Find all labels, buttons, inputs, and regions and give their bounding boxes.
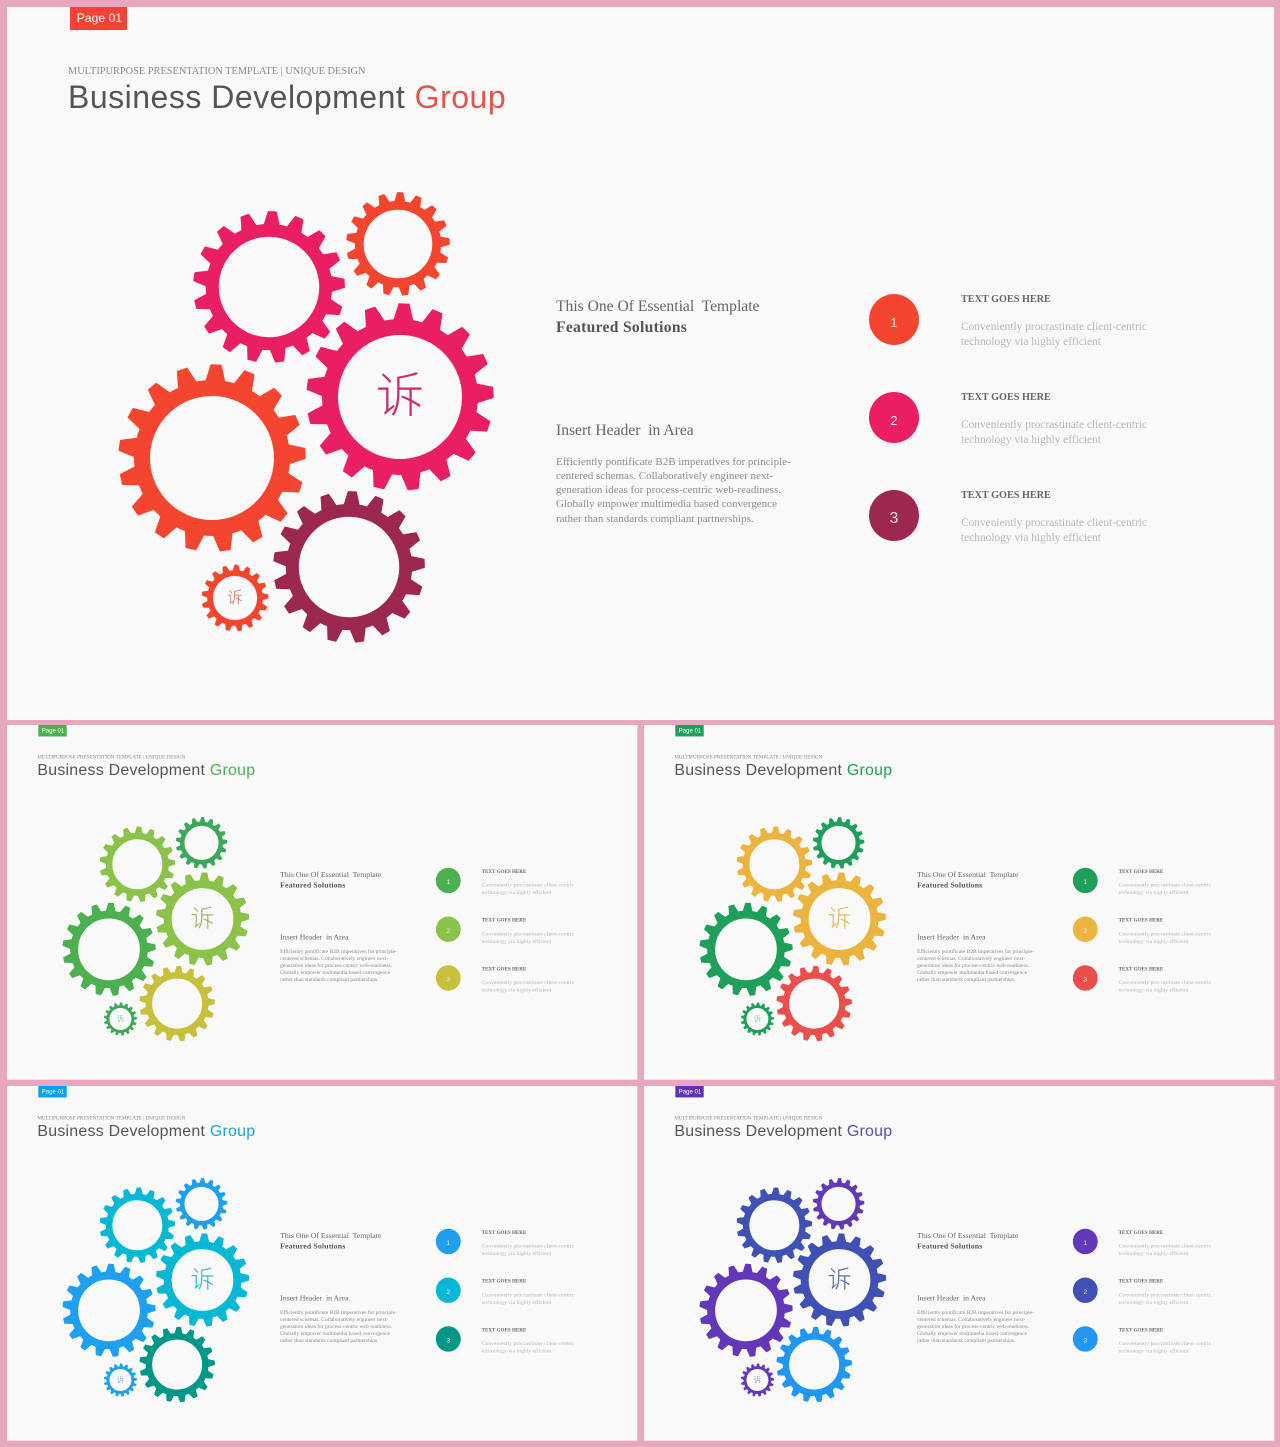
heading: featured solutions: Featured Solutions xyxy=(917,881,982,890)
heading: insert header: Insert Header in Area xyxy=(280,933,349,941)
list item 3: Conveniently procrastinate client-centric xyxy=(1118,980,1211,986)
subtitle: MULTIPURPOSE PRESENTATION TEMPLATE | UNIQUE DESIGN xyxy=(674,754,822,760)
gear: lower red xyxy=(774,965,853,1043)
paragraph: Globally empower multimedia based convergence xyxy=(917,1330,1027,1336)
gear: tiny xyxy=(103,1002,138,1036)
heading: featured solutions xyxy=(917,871,1018,890)
paragraph: Globally empower multimedia based convergence xyxy=(280,969,390,975)
gear: large left xyxy=(61,901,157,998)
list item 2: TEXT GOES HERE xyxy=(1118,918,1163,923)
gear: lower blue xyxy=(774,1326,853,1404)
title: Business Development Group xyxy=(674,1122,892,1140)
list item 3 xyxy=(869,490,1147,544)
panel: green slide xyxy=(7,725,637,1080)
paragraph: generation ideas for process-centric web-readiness. xyxy=(917,1323,1029,1329)
list item 3: technology via highly efficient xyxy=(482,1348,551,1354)
gear: upper middle xyxy=(98,1186,177,1264)
list item 2 xyxy=(436,1278,574,1305)
paragraph: centered schemas. Collaboratively engineer next- xyxy=(556,470,773,482)
list item 3: technology via highly efficient xyxy=(1118,987,1188,993)
heading: featured solutions xyxy=(917,1232,1018,1251)
list item 2: technology via highly efficient xyxy=(1118,1299,1188,1305)
heading: featured solutions: This One Of Essential Template xyxy=(917,871,1018,879)
heading: featured solutions: This One Of Essential Template xyxy=(280,1232,381,1240)
subtitle: MULTIPURPOSE PRESENTATION TEMPLATE | UNIQUE DESIGN xyxy=(37,754,185,760)
list item 3: TEXT GOES HERE xyxy=(1118,1327,1163,1333)
page badge: Page 01 xyxy=(77,11,122,25)
list item 2: Conveniently procrastinate client-centric xyxy=(1118,1292,1211,1298)
paragraph: centered schemas. Collaboratively engineer next- xyxy=(917,1316,1025,1322)
paragraph xyxy=(917,948,1034,983)
gear character small: 诉 xyxy=(227,589,243,607)
list item 1: 1 xyxy=(446,878,450,886)
gear cluster xyxy=(62,817,250,1042)
gear: lower yellow xyxy=(138,965,216,1043)
list item 3: TEXT GOES HERE xyxy=(1118,966,1163,972)
gear character large: 诉 xyxy=(191,1266,214,1293)
paragraph: Efficiently pontificate B2B imperatives for principle- xyxy=(917,948,1033,954)
list item 1 xyxy=(436,868,574,896)
gear: upper middle xyxy=(190,208,348,366)
list item 3: technology via highly efficient xyxy=(1118,1348,1188,1354)
page badge: Page 01 xyxy=(678,1088,701,1095)
gear: top right xyxy=(811,816,865,870)
list item 1: TEXT GOES HERE xyxy=(961,294,1051,305)
heading: featured solutions: This One Of Essential Template xyxy=(556,298,759,314)
heading: featured solutions: Featured Solutions xyxy=(280,881,345,890)
gear: upper middle xyxy=(98,825,177,903)
gear: large left xyxy=(697,901,794,998)
list item 3: 3 xyxy=(1083,976,1087,983)
paragraph: generation ideas for process-centric web-readiness. xyxy=(280,962,392,968)
list item 3: Conveniently procrastinate client-centric xyxy=(1118,1341,1211,1347)
gear character large: 诉 xyxy=(376,370,424,423)
gear: top right xyxy=(175,816,228,870)
list item 2 xyxy=(436,916,574,944)
list item 1: 1 xyxy=(446,1239,450,1247)
list item 3: 3 xyxy=(446,976,450,983)
heading: featured solutions xyxy=(280,1232,382,1251)
paragraph: Efficiently pontificate B2B imperatives for principle- xyxy=(917,1309,1033,1315)
paragraph: Efficiently pontificate B2B imperatives for principle- xyxy=(280,1309,397,1315)
heading: featured solutions: This One Of Essential Template xyxy=(280,871,381,879)
paragraph: generation ideas for process-centric web-readiness. xyxy=(917,962,1029,968)
list item 3: TEXT GOES HERE xyxy=(961,490,1051,501)
gear character large: 诉 xyxy=(827,1266,851,1293)
list item 3: 3 xyxy=(890,510,898,527)
page badge: Page 01 xyxy=(678,727,701,734)
list item 2: 2 xyxy=(446,927,450,934)
panel: green yellow red slide xyxy=(644,725,1274,1080)
paragraph: centered schemas. Collaboratively engineer next- xyxy=(280,1316,388,1322)
gear character small: 诉 xyxy=(116,1375,124,1385)
list item 1: TEXT GOES HERE xyxy=(482,1230,526,1235)
title: Business Development Group xyxy=(37,761,255,779)
paragraph: Efficiently pontificate B2B imperatives for principle- xyxy=(280,948,397,954)
list item 3: technology via highly efficient xyxy=(961,532,1101,544)
paragraph: rather than standards compliant partnerships. xyxy=(280,977,378,983)
subtitle: MULTIPURPOSE PRESENTATION TEMPLATE | UNIQUE DESIGN xyxy=(68,66,366,76)
list item 1: Conveniently procrastinate client-centric xyxy=(961,321,1147,333)
list item 2 xyxy=(1072,916,1211,944)
paragraph: Efficiently pontificate B2B imperatives for principle- xyxy=(556,456,791,468)
gear: top right xyxy=(344,190,452,298)
gear: large right xyxy=(791,1232,887,1328)
heading: featured solutions xyxy=(556,298,759,336)
gear: large left xyxy=(115,361,309,555)
heading: featured solutions xyxy=(280,871,382,890)
list item 1: technology via highly efficient xyxy=(1118,1251,1188,1257)
gear: large right xyxy=(154,871,251,967)
list item 1: 1 xyxy=(1083,1239,1087,1247)
list item 2: technology via highly efficient xyxy=(482,938,551,944)
gear cluster xyxy=(118,192,494,643)
list item 3: TEXT GOES HERE xyxy=(482,1327,526,1333)
paragraph xyxy=(917,1309,1034,1344)
heading: featured solutions: Featured Solutions xyxy=(280,1242,345,1251)
list item 3 xyxy=(1072,1326,1211,1354)
subtitle: MULTIPURPOSE PRESENTATION TEMPLATE | UNIQUE DESIGN xyxy=(674,1115,822,1121)
list item 1: Conveniently procrastinate client-centric xyxy=(1118,1243,1211,1249)
list item 2: TEXT GOES HERE xyxy=(482,918,526,923)
list item 3: Conveniently procrastinate client-centric xyxy=(482,980,574,986)
list item 2: Conveniently procrastinate client-centric xyxy=(482,1292,574,1298)
list item 1: 1 xyxy=(1083,878,1087,886)
gear: large left xyxy=(697,1262,794,1359)
paragraph: rather than standards compliant partnerships. xyxy=(556,513,754,525)
gear: tiny xyxy=(200,563,270,633)
list item 2: 2 xyxy=(1083,927,1087,934)
list item 2 xyxy=(869,392,1147,446)
heading: insert header: Insert Header in Area xyxy=(917,933,985,941)
gear: upper middle xyxy=(735,825,813,903)
list item 1: TEXT GOES HERE xyxy=(482,869,526,874)
list item 1 xyxy=(436,1228,574,1257)
list item 2: 2 xyxy=(1083,1288,1087,1295)
gear: tiny xyxy=(103,1363,138,1397)
gear character small: 诉 xyxy=(753,1014,761,1024)
list item 3 xyxy=(436,1326,574,1354)
gear cluster xyxy=(62,1178,250,1402)
panel: main red slide xyxy=(7,7,1274,720)
list item 2: Conveniently procrastinate client-centric xyxy=(482,931,574,937)
list item 1: 1 xyxy=(890,315,898,330)
list item 2: 2 xyxy=(446,1288,450,1295)
gear: tiny xyxy=(740,1002,774,1036)
paragraph xyxy=(280,948,397,983)
heading: featured solutions: Featured Solutions xyxy=(556,318,687,336)
gear: large left xyxy=(61,1262,157,1359)
paragraph: rather than standards compliant partnerships. xyxy=(917,977,1015,983)
heading: insert header: Insert Header in Area xyxy=(280,1294,349,1302)
page badge: Page 01 xyxy=(42,1088,64,1095)
panel: purple slide xyxy=(644,1086,1274,1441)
paragraph: Globally empower multimedia based convergence xyxy=(917,969,1027,975)
page badge xyxy=(675,725,703,736)
gear cluster xyxy=(700,1178,886,1402)
list item 3: technology via highly efficient xyxy=(482,987,551,993)
list item 2: Conveniently procrastinate client-centric xyxy=(961,419,1147,431)
list item 2 xyxy=(1072,1278,1211,1305)
list item 2: TEXT GOES HERE xyxy=(1118,1279,1163,1284)
list item 2: TEXT GOES HERE xyxy=(961,392,1051,403)
heading: featured solutions: This One Of Essential Template xyxy=(917,1232,1018,1240)
paragraph: rather than standards compliant partnerships. xyxy=(280,1338,378,1344)
list item 3: TEXT GOES HERE xyxy=(482,966,526,972)
paragraph: generation ideas for process-centric web-readiness. xyxy=(280,1323,392,1329)
subtitle: MULTIPURPOSE PRESENTATION TEMPLATE | UNIQUE DESIGN xyxy=(37,1115,185,1121)
paragraph: generation ideas for process-centric web-readiness. xyxy=(556,484,781,496)
page badge xyxy=(675,1086,703,1097)
title: Business Development Group xyxy=(37,1122,255,1140)
list item 2: technology via highly efficient xyxy=(1118,938,1188,944)
paragraph: centered schemas. Collaboratively engineer next- xyxy=(917,955,1025,961)
list item 3: 3 xyxy=(446,1337,450,1344)
list item 3 xyxy=(436,965,574,993)
page badge xyxy=(38,725,67,736)
list item 1: Conveniently procrastinate client-centric xyxy=(482,1243,574,1249)
title: Business Development Group xyxy=(674,761,892,779)
page badge: Page 01 xyxy=(42,727,64,734)
paragraph: centered schemas. Collaboratively engineer next- xyxy=(280,955,388,961)
list item 3: Conveniently procrastinate client-centric xyxy=(961,517,1147,529)
heading: featured solutions: Featured Solutions xyxy=(917,1242,982,1251)
heading: insert header: Insert Header in Area xyxy=(556,422,694,439)
list item 1 xyxy=(1072,1228,1211,1257)
page badge xyxy=(38,1086,67,1097)
gear: top right xyxy=(175,1177,228,1231)
gear cluster xyxy=(700,817,886,1042)
list item 3: 3 xyxy=(1083,1337,1087,1344)
list item 1: TEXT GOES HERE xyxy=(1118,869,1163,874)
list item 3: Conveniently procrastinate client-centric xyxy=(482,1341,574,1347)
gear character small: 诉 xyxy=(753,1375,761,1385)
list item 1: technology via highly efficient xyxy=(961,336,1101,348)
heading: insert header: Insert Header in Area xyxy=(917,1294,985,1302)
paragraph xyxy=(280,1309,397,1344)
list item 2: technology via highly efficient xyxy=(961,434,1101,446)
gear: lower maroon xyxy=(270,488,428,646)
gear: lower teal xyxy=(138,1326,216,1404)
list item 1: Conveniently procrastinate client-centric xyxy=(1118,882,1211,888)
page badge xyxy=(70,7,127,30)
gear character large: 诉 xyxy=(191,905,214,932)
paragraph: rather than standards compliant partnerships. xyxy=(917,1338,1015,1344)
list item 3 xyxy=(1072,965,1211,993)
list item 1 xyxy=(1072,868,1211,896)
list item 2: 2 xyxy=(890,413,898,428)
gear: top right xyxy=(811,1177,865,1231)
gear: large right xyxy=(303,300,497,494)
list item 1: technology via highly efficient xyxy=(482,1251,551,1257)
list item 1: Conveniently procrastinate client-centric xyxy=(482,882,574,888)
list item 1: technology via highly efficient xyxy=(482,890,551,896)
gear: upper middle xyxy=(735,1186,813,1264)
gear character large: 诉 xyxy=(827,905,851,932)
list item 1: TEXT GOES HERE xyxy=(1118,1230,1163,1235)
list item 1: technology via highly efficient xyxy=(1118,890,1188,896)
gear: large right xyxy=(791,871,887,967)
paragraph xyxy=(556,456,791,525)
gear character small: 诉 xyxy=(116,1014,124,1024)
gear: tiny xyxy=(740,1363,774,1397)
panel: blue slide xyxy=(7,1086,637,1441)
list item 2: Conveniently procrastinate client-centric xyxy=(1118,931,1211,937)
list item 2: technology via highly efficient xyxy=(482,1299,551,1305)
paragraph: Globally empower multimedia based convergence xyxy=(280,1330,390,1336)
list item 1 xyxy=(869,294,1147,348)
list item 2: TEXT GOES HERE xyxy=(482,1279,526,1284)
gear: large right xyxy=(154,1232,251,1328)
paragraph: Globally empower multimedia based convergence xyxy=(556,498,777,510)
title: Business Development Group xyxy=(68,79,506,115)
